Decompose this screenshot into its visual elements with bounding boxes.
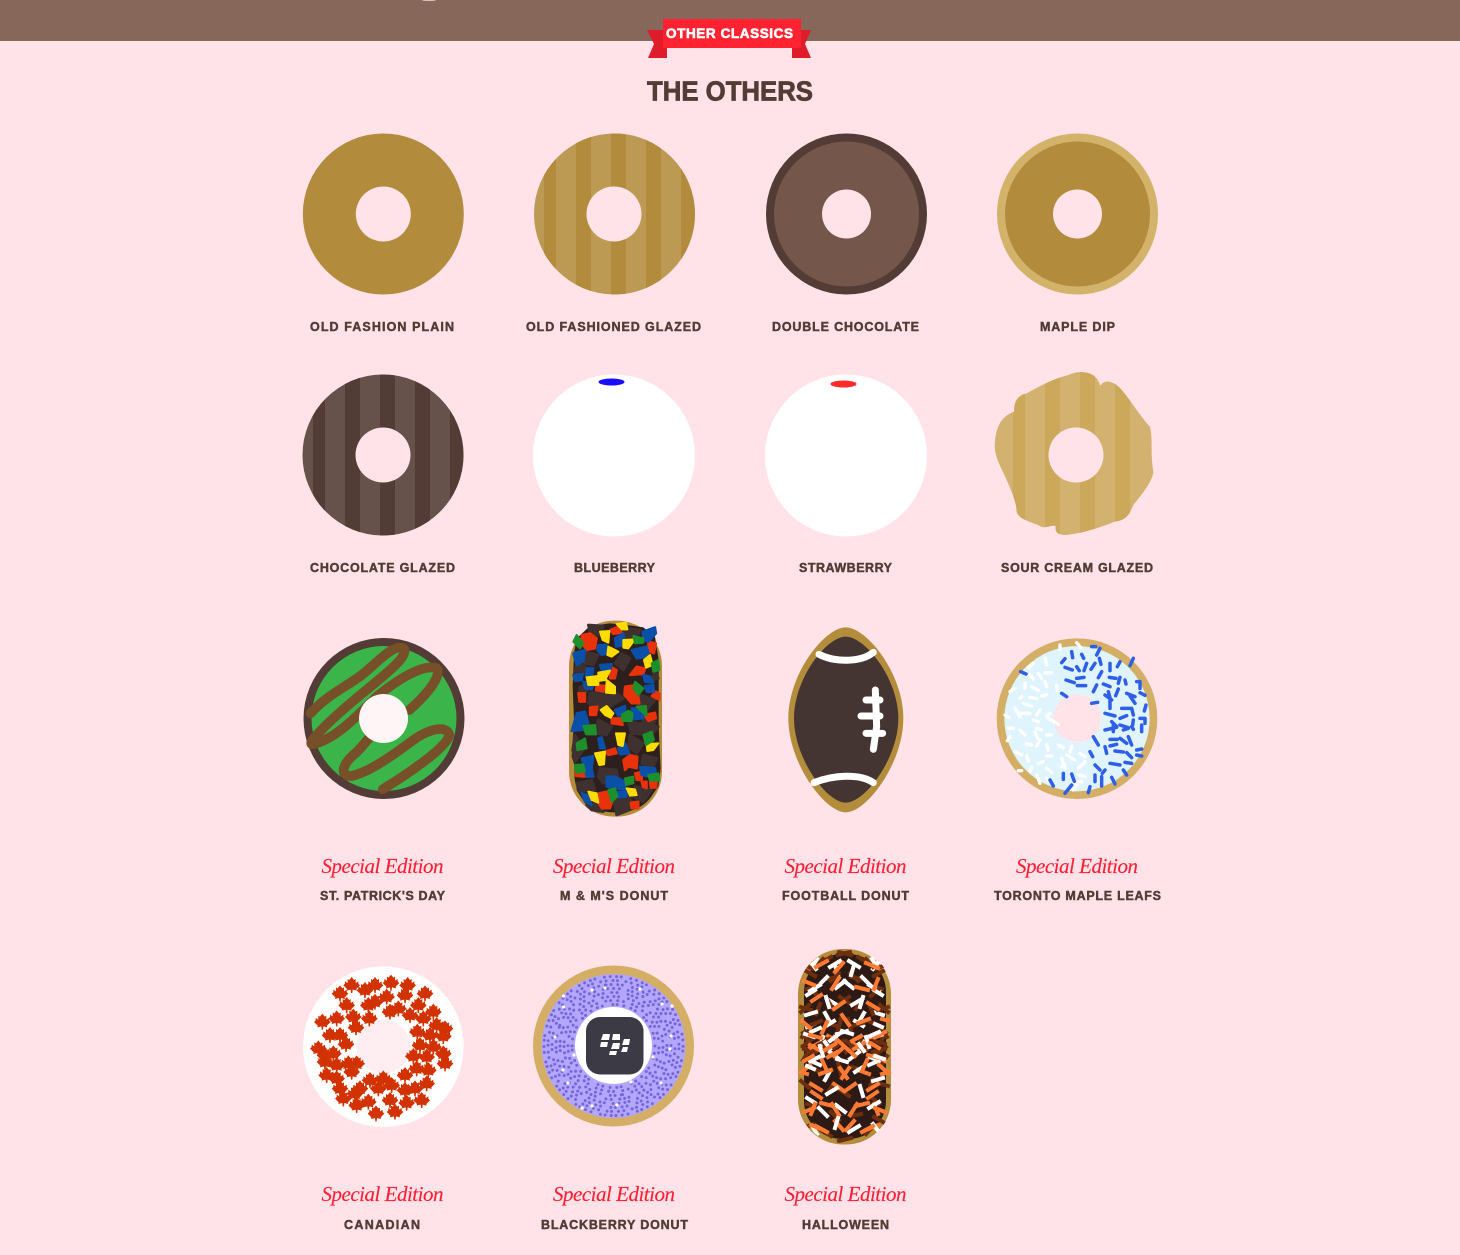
header band — [0, 0, 1460, 41]
icon: striped chocolate donut — [302, 370, 465, 540]
icon: maple donut — [997, 134, 1158, 294]
icon: m&m long john — [569, 621, 662, 817]
panel: halloween — [784, 949, 906, 1232]
special edition tag: Special Edition — [553, 1182, 675, 1206]
special edition tag: Special Edition — [784, 1182, 906, 1206]
panel: strawberry — [765, 374, 927, 575]
icon: chocolate donut — [766, 134, 927, 294]
label: DOUBLE CHOCOLATE — [772, 320, 919, 334]
label: FOOTBALL DONUT — [782, 889, 909, 903]
icon: plain donut — [303, 134, 464, 294]
special edition tag: Special Edition — [322, 854, 444, 878]
icon: striped glazed donut — [534, 130, 696, 300]
icon: blue and white sprinkled donut — [997, 638, 1157, 799]
label: MAPLE DIP — [1040, 320, 1115, 334]
special edition tag: Special Edition — [784, 854, 906, 878]
label: TORONTO MAPLE LEAFS — [994, 889, 1161, 903]
icon: maple leaf donut — [303, 966, 464, 1127]
panel: st. patrick's day — [304, 638, 464, 903]
label: OLD FASHIONED GLAZED — [526, 320, 701, 334]
panel: blueberry — [533, 374, 695, 575]
panel: sour cream glazed — [994, 372, 1154, 572]
icon: blackberry donut — [530, 963, 697, 1129]
label: M & M'S DONUT — [560, 889, 668, 903]
label: HALLOWEEN — [802, 1218, 889, 1232]
icon: strawberry filled donut — [765, 374, 927, 536]
label: OLD FASHION PLAIN — [310, 320, 454, 334]
icon: halloween sprinkled long john — [798, 949, 891, 1144]
special edition tag: Special Edition — [322, 1182, 444, 1206]
label: STRAWBERRY — [799, 561, 893, 575]
label: CHOCOLATE GLAZED — [310, 561, 455, 575]
label: SOUR CREAM GLAZED — [1001, 561, 1153, 575]
panel: old fashion plain — [303, 134, 464, 334]
panel: chocolate glazed — [302, 370, 465, 575]
panel: maple dip — [997, 134, 1158, 334]
panel: m & m's donut — [553, 621, 675, 903]
ribbon banner: other classics: OTHER CLASSICS — [666, 26, 793, 41]
panel: blackberry donut — [530, 963, 697, 1232]
ribbon banner: other classics — [647, 19, 811, 58]
title: THE OTHERS — [647, 76, 813, 106]
label: BLACKBERRY DONUT — [541, 1218, 688, 1232]
icon: football — [788, 627, 903, 812]
icon: sour cream donut — [994, 372, 1154, 535]
special edition tag: Special Edition — [553, 854, 675, 878]
special edition tag: Special Edition — [1016, 854, 1138, 878]
panel: canadian — [303, 966, 464, 1232]
panel: football donut — [782, 627, 909, 903]
panel: double chocolate — [766, 134, 927, 334]
label: CANADIAN — [344, 1218, 420, 1232]
label: BLUEBERRY — [574, 561, 656, 575]
icon: blueberry filled donut — [533, 374, 695, 536]
panel: old fashioned glazed — [526, 130, 701, 334]
icon: green drizzled donut — [304, 638, 464, 799]
label: ST. PATRICK'S DAY — [320, 889, 446, 903]
panel: toronto maple leafs — [994, 638, 1161, 903]
